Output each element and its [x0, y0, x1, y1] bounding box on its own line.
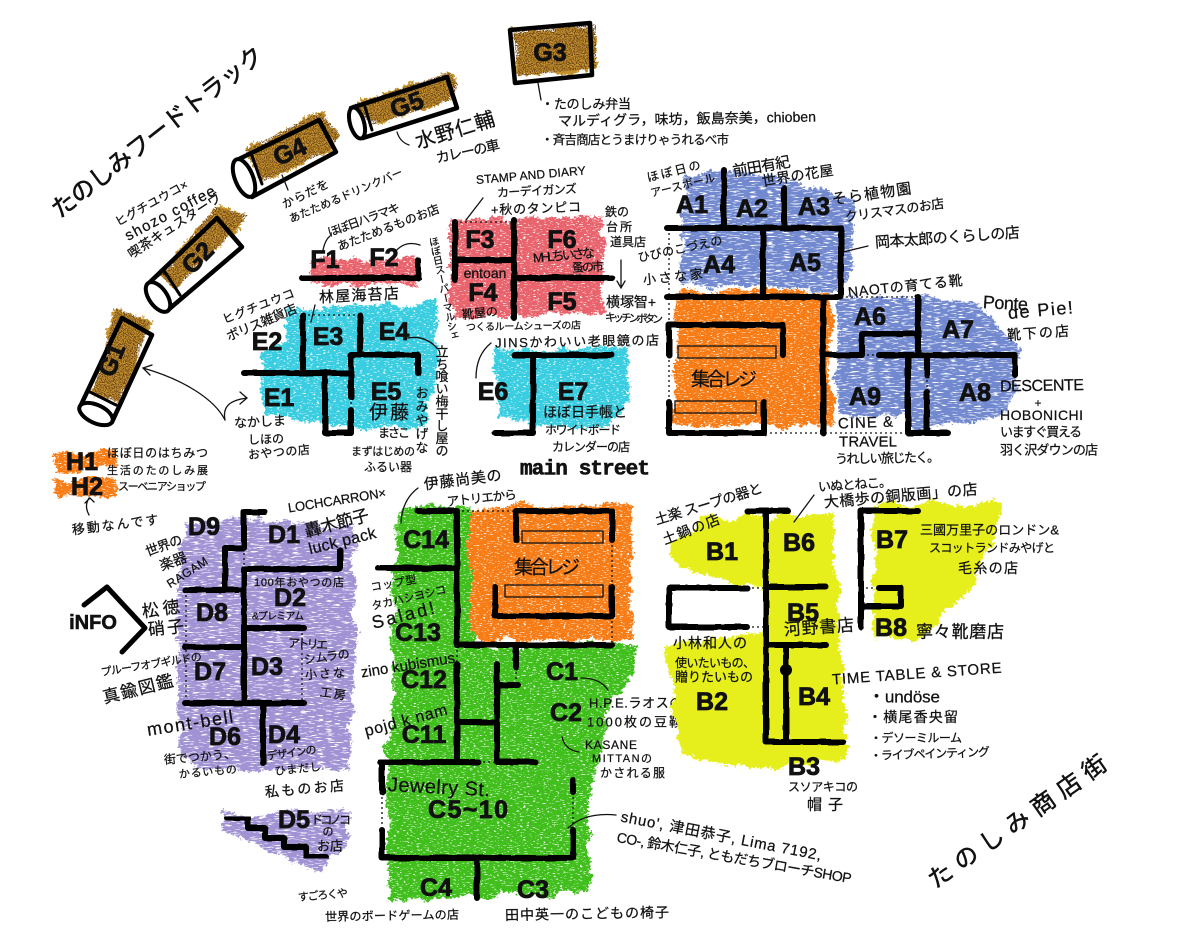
captions E: ボリス雑貨店 [224, 301, 299, 344]
pillar B4 [780, 664, 792, 676]
panel: B shops [653, 474, 1059, 814]
shop labels E: E1 [264, 384, 294, 412]
captions B: いぬとねこ。 [817, 474, 892, 494]
panel: C shops [297, 467, 853, 924]
captions D: 世界の [143, 532, 184, 559]
captions F: あたためるものお店 [335, 202, 441, 254]
panel: F shops [302, 163, 663, 342]
captions B: 土楽 スープの器と [653, 480, 764, 528]
shop labels F: F3 [465, 226, 495, 254]
captions B: 三國万里子のロンドン& [920, 522, 1059, 538]
shop labels D [188, 513, 310, 834]
captions A: クリスマスのお店 [844, 196, 945, 224]
shop labels C [387, 526, 582, 904]
panel: H shops: ほぼ日のはちみつ [107, 446, 208, 460]
captions E: まずはじめの [351, 445, 415, 458]
registers A: 集合レジ [691, 368, 757, 390]
captions E: 立ち喰い梅干し屋の [434, 345, 448, 457]
captions B: ・undöse [868, 688, 940, 706]
captions C: 田中英一のこどもの椅子 [505, 904, 669, 923]
shop labels A [676, 191, 991, 411]
captions D: 街でつかう、 [163, 747, 236, 767]
captions A: 岡本太郎のくらしの店 [874, 224, 1020, 251]
captions C: かされる服 [600, 766, 665, 780]
shop labels E: E3 [313, 323, 343, 351]
shop labels C: C14 [403, 526, 449, 554]
captions A: ほぼ日の [645, 158, 702, 185]
truck captions: マルディグラ，味坊，飯島奈美，chioben [558, 108, 816, 129]
captions B: 小林和人の [673, 635, 747, 651]
captions E: おやつの店 [247, 443, 310, 462]
captions C: 世界のボードゲームの店 [325, 908, 459, 924]
truck captions: 水野仁輔 [412, 108, 498, 154]
captions D [100, 485, 387, 854]
shop labels F: F4 [468, 279, 498, 307]
captions E: 伊藤 [369, 402, 409, 424]
captions D: 轟木節子 [303, 506, 371, 541]
panel: E shops [143, 285, 659, 474]
title: shopping street: たのしみ商店街 [923, 750, 1112, 894]
captions B: ・デソーミルーム [870, 730, 962, 745]
truck captions [113, 83, 816, 280]
captions F: ほぼ日スーパーマルシェ [426, 235, 459, 342]
captions B: 河野書店 [783, 616, 854, 639]
captions D: luck pack [307, 525, 379, 558]
shop labels B: B8 [875, 614, 907, 642]
shop labels C: C13 [395, 619, 441, 647]
truck G2 [141, 207, 248, 316]
shop labels A: A4 [703, 251, 735, 279]
captions B: スコットランドみやげと [929, 541, 1055, 555]
shop labels A: A5 [789, 249, 821, 277]
truck captions: あたためるドリンクバー [287, 166, 405, 226]
panel: food trucks [47, 23, 816, 430]
panel: A shops [637, 154, 1098, 466]
captions E [220, 285, 659, 474]
captions E: おみやげな [414, 386, 428, 454]
captions E: 林屋海苔店 [319, 285, 399, 306]
captions F: 道具店 [610, 235, 646, 249]
shop labels C: C3 [517, 876, 549, 904]
captions A: そら植物園 [831, 180, 912, 208]
truck G4 [228, 112, 340, 200]
captions A: Ponte [982, 292, 1028, 314]
shop labels C: C11 [402, 721, 446, 749]
truck captions: カレーの車 [434, 137, 501, 166]
shop labels F: entoan [464, 265, 506, 281]
captions C: CO-, 鈴木仁子, ともだちブローチSHOP [616, 829, 853, 886]
shop labels C: C12 [401, 666, 447, 694]
shop labels B: B4 [798, 683, 830, 711]
panel: H shops [50, 446, 208, 537]
shop labels A: A1 [676, 191, 708, 219]
captions E: ホワイトボード [545, 423, 621, 437]
captions C: Salad! [370, 598, 437, 633]
captions B: 使いたいもの、 [675, 655, 755, 670]
shop labels D: D3 [251, 653, 283, 681]
captions C: pojd k nam [363, 702, 449, 740]
panel: H shops: H2 [71, 473, 103, 501]
shop labels A: A8 [959, 379, 991, 407]
captions A: + [1034, 396, 1042, 410]
captions D: 100年おやつの店 [254, 575, 344, 589]
captions D: プルーフオブギルドの [100, 649, 203, 679]
truck G1 [76, 308, 152, 430]
captions C: タカハシヨシコ [370, 583, 447, 613]
captions A: 世界の花屋 [761, 162, 834, 189]
shop labels B: B6 [783, 529, 815, 557]
shop labels F: F6 [547, 226, 577, 254]
captions D: アトリエ [288, 636, 328, 652]
captions B: 土鍋の店 [660, 511, 722, 547]
truck captions: ・斉吉商店とうまけりゃうれるべ市 [541, 133, 729, 147]
captions D: mont-bell [145, 707, 234, 740]
captions A: 小さな家 [642, 266, 703, 287]
shop labels E: E4 [379, 318, 409, 346]
captions F: つくるルームシューズの店 [466, 318, 581, 333]
captions C: 伊藤尚美の [423, 467, 502, 493]
captions C: shuo', 津田恭子, Lima 7192, [619, 809, 823, 864]
truck captions: ヒグチユウコ× [113, 178, 190, 229]
shop labels B: B5 [787, 599, 819, 627]
shop labels D: D4 [268, 721, 300, 749]
captions A: NAOTの育てる靴 [847, 272, 963, 300]
captions A: ひびのこづえの [637, 233, 724, 265]
panel: H shops: 移動なんです [71, 512, 159, 537]
captions B: ・ライブペインティング [870, 744, 990, 763]
captions F: 靴屋の [461, 304, 499, 322]
captions B: スソアキコの [788, 780, 858, 794]
captions D: RAGAM [164, 554, 210, 591]
captions A: de Pie! [1007, 297, 1074, 323]
captions D: &プレミアム [252, 610, 304, 622]
shop labels D: D8 [196, 599, 228, 627]
shop labels D: D1 [268, 521, 300, 549]
truck captions: からだを [280, 177, 331, 211]
captions A: うれしい旅じたく。 [835, 450, 940, 466]
shop labels F: F5 [547, 288, 577, 316]
shop labels B: B3 [788, 753, 820, 781]
shop labels B: B2 [696, 688, 728, 716]
captions F: 鉄の [605, 204, 629, 219]
captions C: KASANE [585, 738, 637, 752]
arrows to G1 and E1 [143, 365, 247, 420]
shop labels C: C5~10 [428, 796, 508, 824]
panel: H shops: スーベニアショップ [118, 480, 206, 493]
truck captions: 喫茶キュスターヴ [125, 190, 224, 261]
truck G1: G1 [93, 339, 131, 381]
stand G3: G3 [533, 39, 567, 67]
panel: info sign: iNFO [69, 612, 117, 634]
captions C: MITTANの [592, 753, 652, 765]
captions D: 工房 [319, 685, 347, 703]
panel: D shops [100, 485, 387, 870]
shop labels D: D5 [278, 806, 310, 834]
shop labels A: A3 [798, 193, 830, 221]
shop labels F [310, 226, 577, 316]
captions F: 横塚智+ [606, 294, 656, 310]
captions F [323, 163, 663, 342]
captions D: かるいもの [178, 763, 237, 781]
captions E: なかしま [234, 413, 286, 430]
main street label: main street [520, 458, 650, 482]
shop labels D: D9 [188, 513, 220, 541]
shop labels F: F1 [310, 246, 340, 274]
truck G2: G2 [176, 236, 220, 280]
captions D: ひまだし [274, 760, 321, 778]
shop labels F: F2 [369, 244, 399, 272]
captions F: 蚤の市 [572, 259, 604, 275]
shop labels E [252, 318, 588, 412]
shop labels B: B1 [706, 538, 738, 566]
captions C [297, 467, 853, 924]
shop labels E: E2 [252, 328, 282, 356]
panel: info sign [69, 587, 145, 652]
captions E: まさこ [378, 426, 410, 440]
captions C: H.P.E.ラオスの布 [589, 696, 696, 710]
captions B [653, 474, 1059, 814]
truck G4: G4 [269, 132, 311, 172]
captions E: しほの [248, 432, 284, 447]
captions D: の [322, 826, 334, 838]
captions D: お店 [317, 838, 343, 854]
captions E: ほぼ日手帳と [543, 404, 627, 420]
shop labels E: E6 [478, 378, 508, 406]
truck G5 [346, 72, 458, 140]
captions C: すごろくや [297, 886, 348, 904]
shop labels A: A2 [736, 195, 768, 223]
panel: H shops: 生活のたのしみ展 [107, 463, 208, 477]
captions D: 硝子 [147, 617, 185, 639]
captions A: いますぐ買える [1000, 424, 1082, 440]
captions B: 寧々靴磨店 [916, 622, 1004, 642]
captions B: 帽子 [807, 796, 843, 814]
title: food truck: たのしみフードトラック [47, 42, 269, 224]
panel: H shops: H1 [66, 448, 98, 476]
captions C: アトリエから [446, 488, 517, 509]
captions E: ヒグチユウコ [220, 286, 296, 327]
registers A [675, 346, 776, 413]
shop labels E: E5 [371, 378, 401, 406]
captions B: TIME TABLE & STORE [831, 660, 1002, 688]
captions A: 前田有紀 [732, 154, 792, 180]
truck captions: shozo coffee [122, 183, 218, 245]
captions F: ほぼ日ハラマキ [326, 200, 402, 240]
captions D: 小さな [305, 666, 345, 682]
captions D: シムラの [303, 647, 351, 667]
captions D: 楽器 [157, 549, 189, 574]
captions A: アースボール [649, 171, 716, 200]
shop labels C: Jewelry St. [387, 774, 490, 801]
truck G5: G5 [387, 86, 428, 124]
shop labels C: C2 [550, 699, 582, 727]
captions A: TRAVEL [839, 434, 897, 450]
shop labels B: B7 [876, 526, 908, 554]
captions F: +秋のタンピコ [491, 199, 581, 217]
captions A: HOBONICHI [1000, 407, 1083, 423]
shop labels D: D7 [194, 658, 226, 686]
captions B: 毛糸の店 [958, 560, 1018, 576]
shop labels B [696, 526, 908, 781]
captions F: キッチンボタン [605, 311, 663, 326]
truck captions: ・たのしみ弁当 [541, 96, 631, 112]
captions F: MHLちいさな [532, 245, 595, 265]
stand G3 [510, 23, 596, 83]
captions B: 大橋歩の銅版画」の店 [823, 481, 978, 511]
shop labels A: A9 [849, 383, 881, 411]
shop labels A: A7 [942, 316, 974, 344]
captions A: 靴下の店 [1006, 323, 1069, 343]
shop labels D: D2 [274, 584, 306, 612]
captions C: コップ型 [370, 572, 417, 594]
captions D: 松徳 [141, 597, 181, 621]
captions E: カレンダーの店 [552, 439, 630, 454]
captions A [637, 154, 1098, 466]
shop labels E: E7 [558, 378, 588, 406]
shop labels A: A6 [854, 303, 886, 331]
registers C: 集合レジ [514, 556, 580, 578]
captions A: 羽く沢ダウンの店 [1000, 442, 1098, 458]
captions D: LOCHCARRON× [287, 485, 387, 515]
captions F: 台所 [606, 219, 632, 234]
captions F: STAMP AND DIARY [475, 163, 586, 187]
shop labels C: C1 [546, 658, 578, 686]
captions A: CINE & [838, 414, 893, 432]
captions D: 真鍮図鑑 [101, 671, 175, 707]
captions D: 私ものお店 [264, 777, 344, 800]
captions B: 贈りたいもの [675, 670, 753, 684]
captions B: ・横尾香央留 [868, 709, 958, 725]
registers C [505, 531, 603, 597]
stairs D5 [227, 818, 326, 857]
captions C: 1000枚の豆鞍 [587, 714, 682, 730]
captions E: JINSかわいい老眼鏡の店 [495, 333, 659, 350]
captions D: デザインの [266, 742, 317, 763]
captions A: DESCENTE [1000, 377, 1084, 395]
captions C: zino kubismus [360, 650, 456, 681]
captions F: カーデイガンズ [497, 181, 577, 200]
shop labels C: C4 [420, 874, 452, 902]
captions D: ドコノコ [311, 813, 351, 827]
shop labels D: D6 [209, 723, 241, 751]
captions E: ふるい器 [364, 460, 412, 474]
